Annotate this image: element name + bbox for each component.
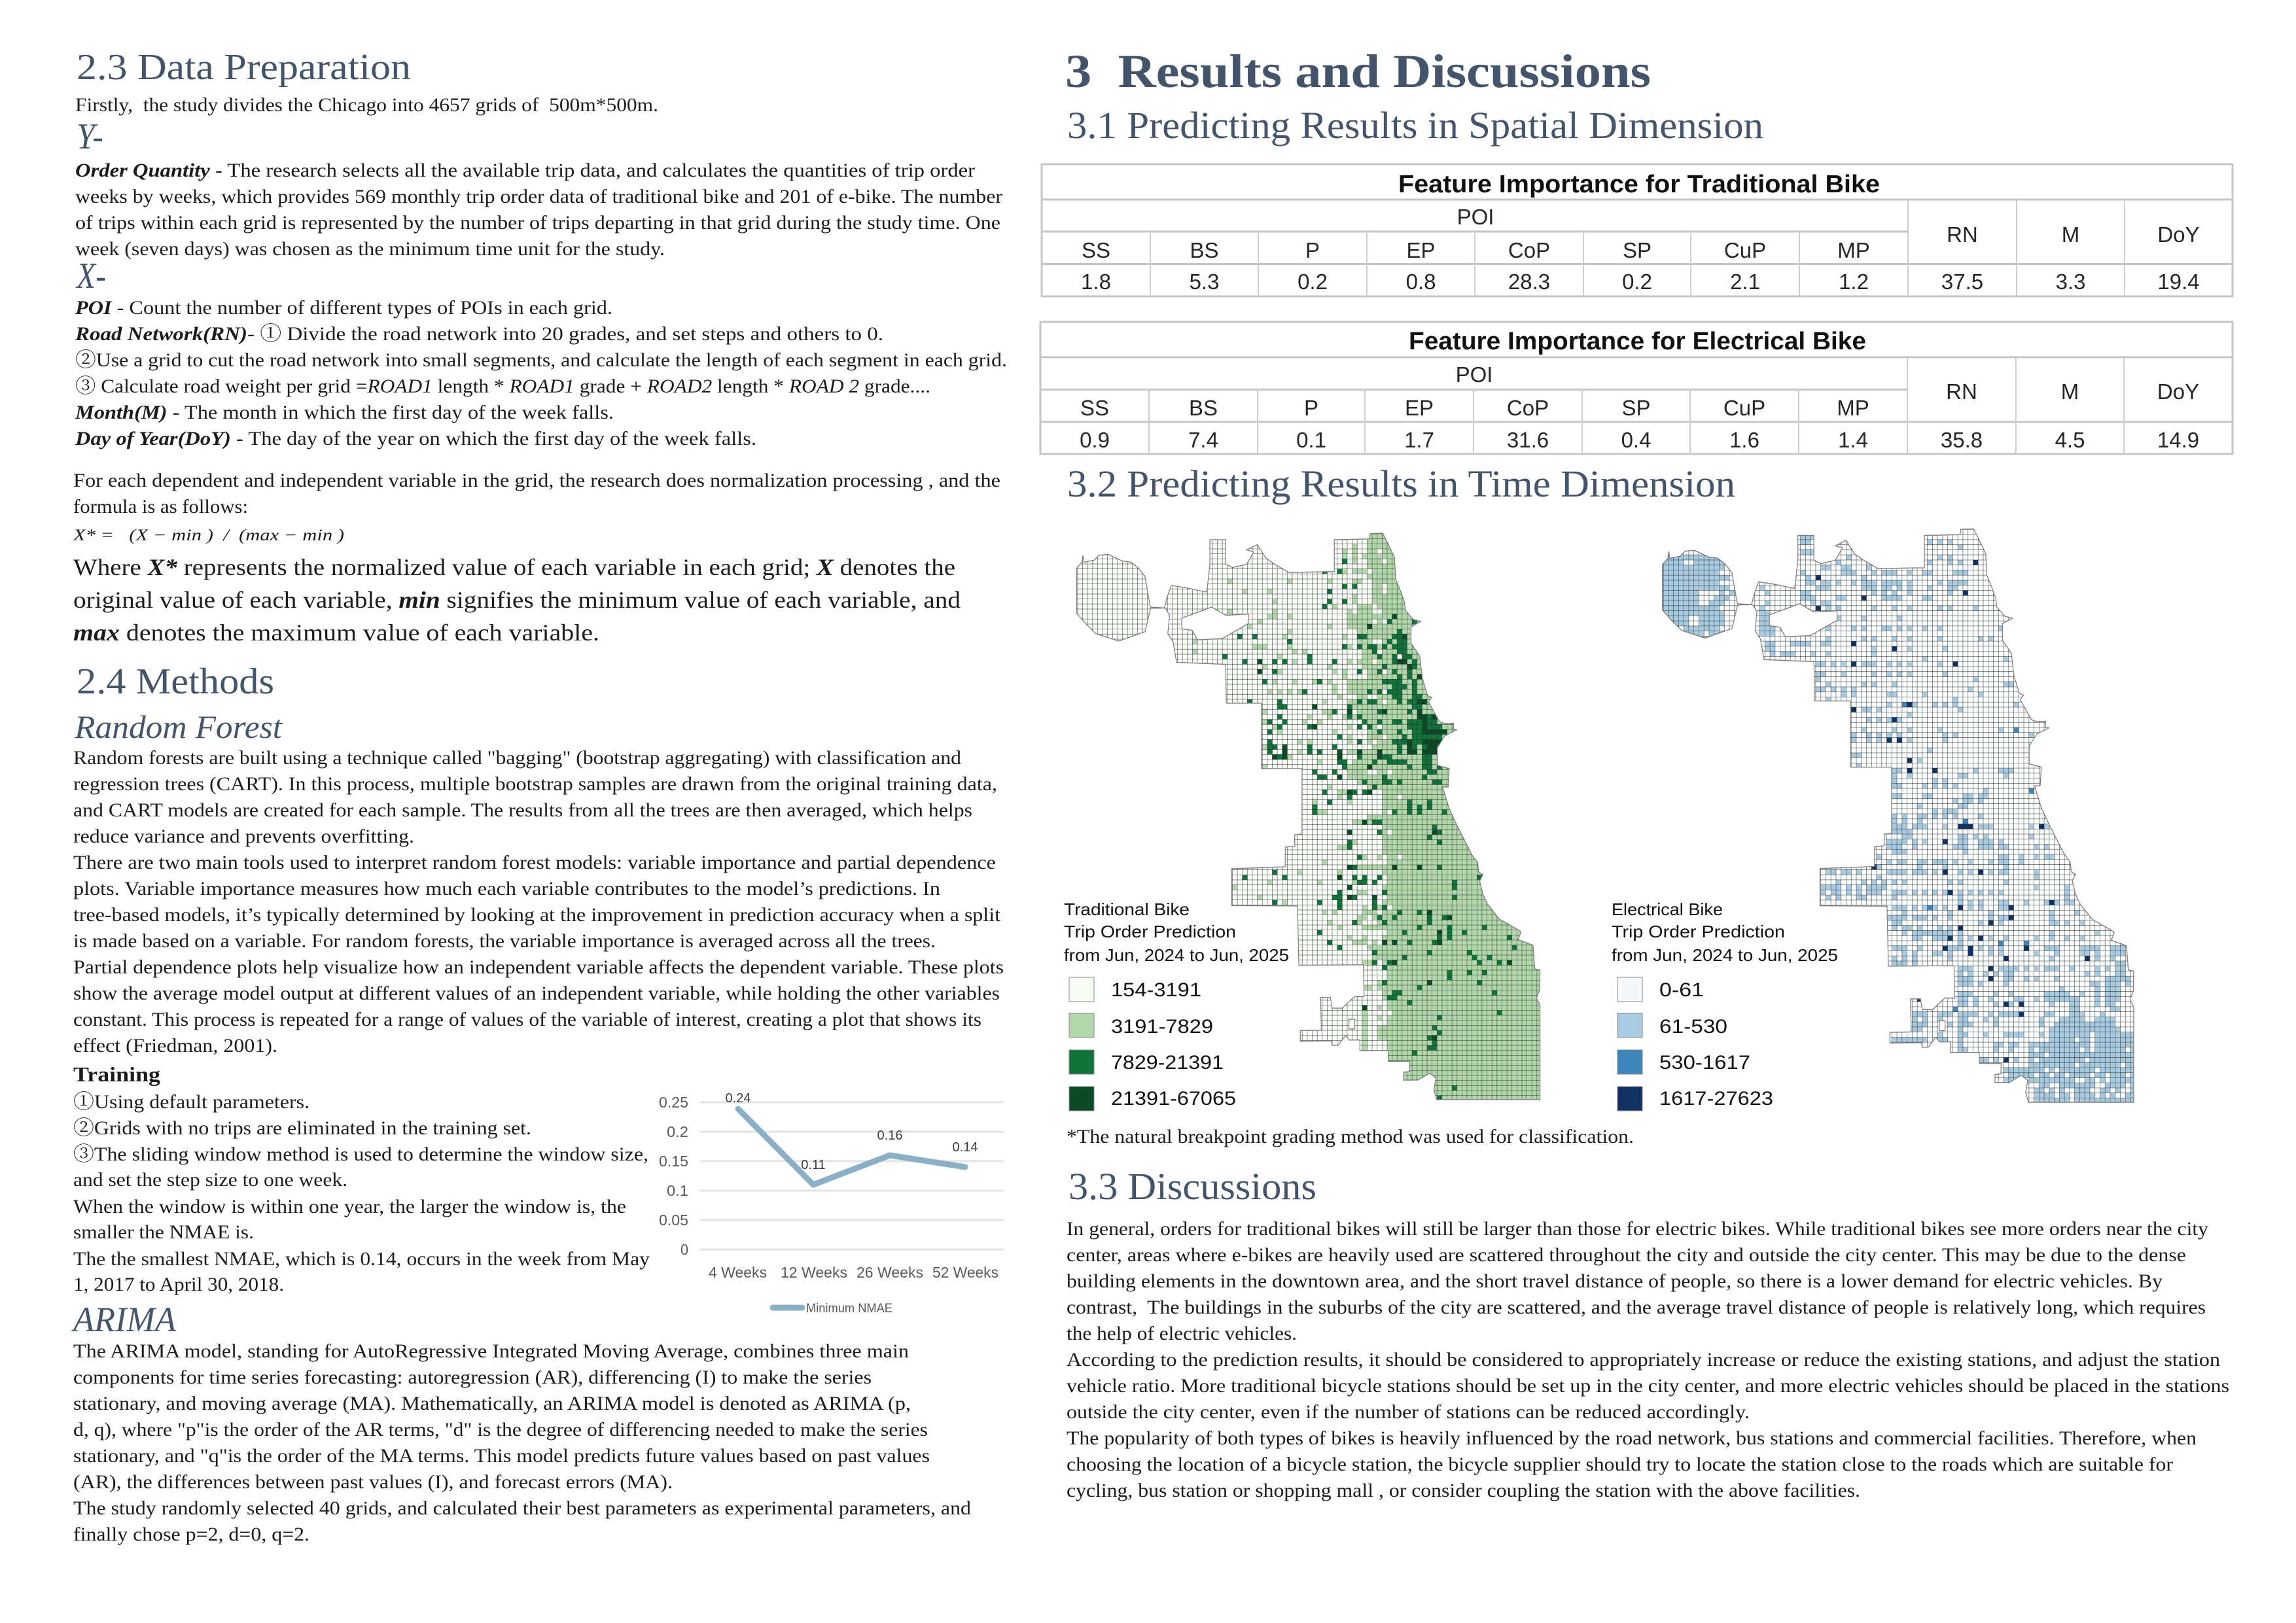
table header labels: RN bbox=[1946, 379, 1977, 404]
chart x axis labels: 4 Weeks bbox=[709, 1264, 767, 1281]
table values: 2.1 bbox=[1730, 270, 1760, 294]
table header labels: SP bbox=[1623, 238, 1651, 262]
text block: discussion paragraphs: According to the prediction results, it should be considered to appropriately increase or reduce the existing stations, and adjust the station bbox=[1067, 1349, 2220, 1370]
text block: random forest description: plots. Variable importance measures how much each variable contributes to the model’s predictions. In bbox=[73, 878, 940, 899]
text block: normalization intro bbox=[73, 470, 1000, 517]
table header labels: RN bbox=[1947, 222, 1978, 247]
text block: random forest description: and CART models are created for each sample. The results from all the trees are then averaged, which helps bbox=[73, 799, 972, 821]
formula: X* = (X − min ) / (max − min ) bbox=[73, 527, 344, 544]
table values: 35.8 bbox=[1941, 428, 1983, 452]
heading: Y-: Y- bbox=[77, 116, 103, 157]
table values: 1.2 bbox=[1839, 270, 1869, 294]
legend labels: 0-61 bbox=[1659, 979, 1704, 1001]
text block: training steps: ①Using default parameters. bbox=[73, 1091, 309, 1113]
table values: 3.3 bbox=[2056, 270, 2085, 294]
legend labels bbox=[1659, 979, 1773, 1109]
table values bbox=[1081, 270, 2200, 294]
text block: independent variables: Month(M) - The month in which the first day of the week falls. bbox=[75, 402, 614, 423]
table values: 0.9 bbox=[1080, 428, 1110, 452]
text block: order quantity bbox=[75, 160, 1002, 260]
heading: 3.1 Predicting Results in Spatial Dimension: 3.1 Predicting Results in Spatial Dimension bbox=[1067, 104, 1763, 147]
text block: normalization intro: For each dependent and independent variable in the grid, the research does normalization processing , and the bbox=[73, 470, 1000, 491]
chart y axis labels: 0.15 bbox=[659, 1153, 688, 1170]
chart value labels: 0.14 bbox=[953, 1140, 978, 1155]
table values bbox=[1080, 428, 2199, 452]
table header labels: SS bbox=[1082, 238, 1110, 262]
text block: training steps: ②Grids with no trips are eliminated in the training set. bbox=[73, 1117, 531, 1139]
table values: 1.7 bbox=[1404, 428, 1434, 452]
text block: ARIMA description: d, q), where "p"is the order of the AR terms, "d" is the degree of differencing needed to make the series bbox=[73, 1419, 928, 1440]
section 2.3: data preparation bbox=[73, 47, 1007, 646]
chart data line bbox=[738, 1109, 965, 1185]
text block: random forest description: show the average model output at different values of an independent variable, while holding the other variables bbox=[73, 983, 1000, 1004]
legend title: Traditional Bike bbox=[1064, 899, 1190, 919]
legend labels: 1617-27623 bbox=[1659, 1088, 1773, 1109]
text: grid intro: Firstly, the study divides the Chicago into 4657 grids of 500m*500m. bbox=[75, 94, 658, 116]
text block: formula explanation: original value of each variable, min signifies the minimum value of each variable, and bbox=[73, 587, 961, 613]
legend title: Trip Order Prediction bbox=[1612, 922, 1785, 941]
table values: 19.4 bbox=[2157, 270, 2200, 294]
table header labels: CoP bbox=[1507, 396, 1549, 420]
table header labels: MP bbox=[1837, 238, 1870, 262]
chart value labels: 0.24 bbox=[726, 1091, 751, 1106]
legend swatches bbox=[1617, 977, 1642, 1111]
heading: 2.4 Methods: 2.4 Methods bbox=[77, 661, 274, 702]
text block: ARIMA description: stationary, and "q"is the order of the MA terms. This model predicts future values based on past values bbox=[73, 1445, 930, 1467]
table values: 1.8 bbox=[1081, 270, 1111, 294]
legend labels: 7829-21391 bbox=[1111, 1052, 1224, 1073]
text block: random forest description: reduce variance and prevents overfitting. bbox=[73, 826, 414, 847]
heading: ARIMA: ARIMA bbox=[71, 1300, 177, 1339]
text block: independent variables: ②Use a grid to cut the road network into small segments, and calculate the length of each segment in each grid. bbox=[75, 349, 1007, 371]
heading: 2.3 Data Preparation: 2.3 Data Preparation bbox=[77, 47, 411, 88]
text block: formula explanation bbox=[73, 554, 961, 646]
text block: normalization intro: formula is as follows: bbox=[73, 496, 248, 517]
table values: 0.2 bbox=[1622, 270, 1652, 294]
table values: 14.9 bbox=[2157, 428, 2199, 452]
table values: 0.8 bbox=[1406, 270, 1436, 294]
table header labels: MP bbox=[1837, 396, 1869, 420]
text block: discussion paragraphs: contrast, The buildings in the suburbs of the city are scattered, and the average travel distance of people is relatively long, which requires bbox=[1067, 1297, 2206, 1318]
legend labels: 61-530 bbox=[1659, 1016, 1727, 1038]
section 2.4: methods bbox=[71, 661, 1004, 1545]
legend labels: 530-1617 bbox=[1659, 1052, 1750, 1073]
table header labels: SP bbox=[1621, 396, 1651, 420]
chart y axis labels: 0.1 bbox=[667, 1182, 688, 1199]
text block: training steps bbox=[73, 1091, 650, 1295]
text block: training steps: When the window is within one year, the larger the window is, the bbox=[73, 1196, 626, 1217]
chart value labels bbox=[726, 1091, 978, 1172]
text block: discussion paragraphs: outside the city center, even if the number of stations can be reduced accordingly. bbox=[1067, 1401, 1750, 1423]
table values: 0.2 bbox=[1298, 270, 1328, 294]
table header labels: P bbox=[1305, 238, 1320, 262]
text block: discussion paragraphs: the help of electric vehicles. bbox=[1067, 1323, 1297, 1344]
table: feature importance for electrical bike bbox=[1040, 322, 2233, 454]
legend: electrical bike bbox=[1612, 899, 1838, 1111]
table header labels: CuP bbox=[1724, 238, 1766, 262]
text block: training steps: smaller the NMAE is. bbox=[73, 1221, 254, 1243]
text block: independent variables: Road Network(RN) - ① Divide the road network into 20 grades, and set steps and others to 0. bbox=[75, 323, 883, 345]
text block: random forest description: Partial dependence plots help visualize how an independent variable affects the dependent variable. These plots bbox=[73, 956, 1004, 978]
legend labels: 21391-67065 bbox=[1111, 1088, 1236, 1109]
table header labels: BS bbox=[1189, 396, 1218, 420]
text block: discussion paragraphs: center, areas where e-bikes are heavily used are scattered throughout the city and outside the city center. This may be due to the dense bbox=[1067, 1244, 2186, 1266]
legend title: Electrical Bike bbox=[1612, 899, 1723, 919]
chart value labels: 0.11 bbox=[801, 1158, 826, 1172]
heading: X-: X- bbox=[75, 256, 106, 296]
table values: 28.3 bbox=[1508, 270, 1550, 294]
text block: discussion paragraphs: vehicle ratio. More traditional bicycle stations should be set up in the city center, and more electric vehicles should be placed in the stations bbox=[1067, 1375, 2229, 1397]
chart x axis labels: 52 Weeks bbox=[932, 1264, 998, 1281]
legend labels: 3191-7829 bbox=[1111, 1016, 1213, 1038]
section 3.3: discussions bbox=[1067, 1165, 2229, 1501]
chart y axis labels: 0.05 bbox=[659, 1212, 688, 1229]
legend labels bbox=[1111, 979, 1236, 1109]
table header labels bbox=[1080, 362, 2199, 420]
text block: order quantity: Order Quantity - The research selects all the available trip data, and calculates the quantities of trip order bbox=[75, 160, 975, 181]
table header labels: M bbox=[2062, 222, 2079, 247]
table values: 37.5 bbox=[1941, 270, 1983, 294]
text block: random forest description: constant. This process is repeated for a range of values of the variable of interest, creating a plot that shows its bbox=[73, 1009, 981, 1030]
table title: Feature Importance for Electrical Bike bbox=[1409, 328, 1866, 355]
text block: discussion paragraphs: In general, orders for traditional bikes will still be larger than those for electric bikes. While traditional bikes see more orders near the city bbox=[1067, 1218, 2208, 1240]
text block: discussion paragraphs bbox=[1067, 1218, 2229, 1501]
heading: Random Forest: Random Forest bbox=[74, 708, 283, 745]
table header labels: BS bbox=[1190, 238, 1219, 262]
text block: order quantity: week (seven days) was chosen as the minimum time unit for the study. bbox=[75, 238, 665, 260]
line chart: minimum NMAE by window size bbox=[659, 1091, 1004, 1316]
text block: ARIMA description: (AR), the differences between past values (I), and forecast errors (MA). bbox=[73, 1471, 673, 1493]
text block: discussion paragraphs: cycling, bus station or shopping mall , or consider coupling the station with the above facilities. bbox=[1067, 1480, 1860, 1501]
map: traditional bike trip order prediction bbox=[1072, 529, 1567, 1111]
text block: random forest description: is made based on a variable. For random forests, the variable importance is averaged across all the trees. bbox=[73, 930, 936, 952]
table title: Feature Importance for Traditional Bike bbox=[1398, 171, 1880, 198]
chart y axis labels: 0.2 bbox=[667, 1123, 688, 1140]
map: electrical bike trip order prediction bbox=[1658, 524, 2141, 1113]
chart value labels: 0.16 bbox=[877, 1128, 902, 1143]
table header labels: CuP bbox=[1723, 396, 1765, 420]
chart y axis labels bbox=[659, 1094, 688, 1258]
legend title: Trip Order Prediction bbox=[1064, 922, 1236, 941]
table values: 0.1 bbox=[1296, 428, 1326, 452]
heading: 3.3 Discussions: 3.3 Discussions bbox=[1069, 1165, 1316, 1208]
text block: ARIMA description: The study randomly selected 40 grids, and calculated their best parameters as experimental parameters, and bbox=[73, 1497, 971, 1519]
text block: random forest description: tree-based models, it’s typically determined by looking at the improvement in prediction accuracy when a split bbox=[73, 904, 1001, 926]
table header labels: M bbox=[2061, 379, 2079, 404]
table values: 7.4 bbox=[1188, 428, 1218, 452]
text block: order quantity: weeks by weeks, which provides 569 monthly trip order data of traditional bike and 201 of e-bike. The number bbox=[75, 186, 1002, 207]
footnote: *The natural breakpoint grading method was used for classification. bbox=[1067, 1126, 1634, 1147]
table header labels bbox=[1082, 205, 2200, 262]
table header labels: POI bbox=[1456, 362, 1492, 387]
legend title bbox=[1064, 899, 1289, 965]
text block: ARIMA description: The ARIMA model, standing for AutoRegressive Integrated Moving Average, combines three main bbox=[73, 1340, 909, 1362]
table header labels: CoP bbox=[1508, 238, 1550, 262]
text block: ARIMA description: components for time series forecasting: autoregression (AR), differencing (I) to make the series bbox=[73, 1367, 872, 1388]
table values: 1.4 bbox=[1838, 428, 1868, 452]
heading: 3.2 Predicting Results in Time Dimension: 3.2 Predicting Results in Time Dimension bbox=[1067, 462, 1735, 505]
text block: ARIMA description: stationary, and moving average (MA). Mathematically, an ARIMA model is denoted as ARIMA (p, bbox=[73, 1393, 911, 1414]
text block: ARIMA description: finally chose p=2, d=0, q=2. bbox=[73, 1524, 309, 1545]
text block: order quantity: of trips within each grid is represented by the number of trips departing in that grid during the study time. One bbox=[75, 212, 1000, 234]
legend title: from Jun, 2024 to Jun, 2025 bbox=[1612, 945, 1838, 965]
text block: training steps: ③The sliding window method is used to determine the window size, bbox=[73, 1143, 648, 1165]
table values: 4.5 bbox=[2055, 428, 2085, 452]
text block: random forest description bbox=[73, 747, 1004, 1056]
text block: formula explanation: max denotes the maximum value of each variable. bbox=[73, 620, 599, 646]
text block: random forest description: effect (Friedman, 2001). bbox=[73, 1035, 277, 1056]
text block: discussion paragraphs: building elements in the downtown area, and the short travel distance of people, so there is a lower demand for electric vehicles. By bbox=[1067, 1270, 2163, 1292]
table header labels: P bbox=[1304, 396, 1318, 420]
text block: random forest description: Random forests are built using a technique called "bagging" (bootstrap aggregating) with classification and bbox=[73, 747, 961, 769]
legend swatches bbox=[1069, 977, 1094, 1111]
table header labels: EP bbox=[1405, 396, 1434, 420]
text block: discussion paragraphs: choosing the location of a bicycle station, the bicycle supplier should try to locate the station close to the roads which are suitable for bbox=[1067, 1454, 2173, 1475]
table values: 5.3 bbox=[1190, 270, 1219, 294]
chart x axis labels: 26 Weeks bbox=[857, 1264, 923, 1281]
text block: independent variables bbox=[75, 297, 1007, 449]
table header labels: DoY bbox=[2157, 379, 2199, 404]
title: 3 Results and Discussions: 3 Results and Discussions bbox=[1065, 45, 1651, 97]
text block: independent variables: POI - Count the number of different types of POIs in each grid. bbox=[75, 297, 612, 319]
text block: independent variables: Day of Year(DoY) - The day of the year on which the first day of the week falls. bbox=[75, 428, 756, 449]
table header labels: DoY bbox=[2157, 222, 2200, 247]
text block: training steps: and set the step size to one week. bbox=[73, 1169, 347, 1191]
legend: traditional bike bbox=[1064, 899, 1289, 1111]
table header labels: SS bbox=[1080, 396, 1109, 420]
chart y axis labels: 0.25 bbox=[659, 1094, 688, 1111]
table: feature importance for traditional bike bbox=[1042, 164, 2233, 296]
chart legend: Minimum NMAE bbox=[806, 1302, 892, 1316]
table values: 1.6 bbox=[1729, 428, 1759, 452]
text block: training steps: 1, 2017 to April 30, 2018. bbox=[73, 1274, 284, 1295]
chart x axis labels: 12 Weeks bbox=[781, 1264, 847, 1281]
text block: random forest description: There are two main tools used to interpret random forest models: variable importance and partial dependence bbox=[73, 852, 996, 873]
table header labels: POI bbox=[1457, 205, 1494, 229]
table values: 0.4 bbox=[1621, 428, 1651, 452]
chart x axis labels bbox=[709, 1264, 998, 1281]
legend labels: 154-3191 bbox=[1111, 979, 1201, 1001]
text block: random forest description: regression trees (CART). In this process, multiple bootstrap samples are drawn from the original training data, bbox=[73, 773, 997, 795]
text block: ARIMA description bbox=[73, 1340, 971, 1545]
text block: independent variables: ③ Calculate road weight per grid = ROAD1 length * ROAD1 grade + ROAD2 length * ROAD 2 grade.... bbox=[75, 375, 930, 397]
legend title: from Jun, 2024 to Jun, 2025 bbox=[1064, 945, 1289, 965]
text block: discussion paragraphs: The popularity of both types of bikes is heavily influenced by the road network, bus stations and commercial facilities. Therefore, when bbox=[1067, 1427, 2197, 1449]
table values: 31.6 bbox=[1507, 428, 1549, 452]
text block: formula explanation: Where X* represents the normalized value of each variable in each grid; X denotes the bbox=[73, 554, 955, 580]
legend title bbox=[1612, 899, 1838, 965]
heading: Training: Training bbox=[73, 1062, 160, 1086]
text block: training steps: The the smallest NMAE, which is 0.14, occurs in the week from May bbox=[73, 1248, 650, 1270]
chart y axis labels: 0 bbox=[680, 1241, 688, 1258]
table header labels: EP bbox=[1406, 238, 1436, 262]
